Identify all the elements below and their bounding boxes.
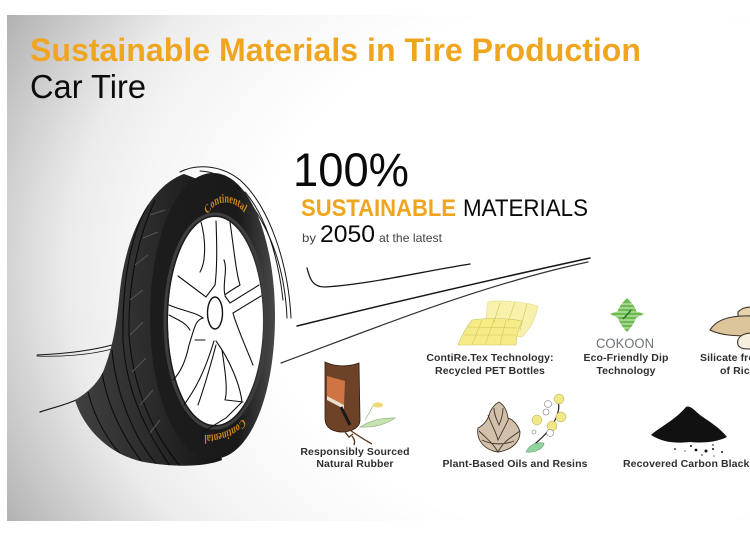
item: Plant-Based Oils and Resins	[442, 394, 588, 470]
title: Car Tire	[30, 68, 146, 105]
headline: 100% sustainable materials by 2050: 100%	[293, 143, 409, 196]
headline: 100% sustainable materials by 2050	[293, 143, 588, 248]
Cokoon wordmark: COKOON	[596, 336, 654, 351]
label: Recovered Carbon Black	[623, 458, 750, 470]
icon: textile	[458, 301, 538, 345]
icon: rubber tree trunk	[325, 362, 395, 445]
headline: 100% sustainable materials by 2050: at the latest	[379, 231, 443, 245]
item: Recovered Carbon Black	[623, 407, 750, 470]
icon: rapeseed flower	[526, 394, 566, 452]
label: Recycled PET Bottles	[435, 365, 545, 377]
speed lines and car outline	[37, 167, 590, 412]
headline: 100% sustainable materials by 2050: by	[302, 231, 316, 245]
item: Cokoon	[583, 298, 669, 377]
label: Natural Rubber	[316, 458, 394, 470]
icon: green diamond	[610, 298, 644, 332]
rim opening	[168, 217, 263, 425]
tread grooves	[88, 200, 180, 466]
label: Eco-Friendly Dip	[583, 352, 669, 364]
Continental logo bottom: Continental	[204, 420, 246, 444]
icon: pine cone	[478, 402, 520, 452]
headline: 100% sustainable materials by 2050: 2050	[320, 221, 375, 248]
tire sidewall	[150, 173, 275, 459]
rim edge highlight	[165, 214, 266, 428]
title	[30, 32, 641, 105]
item: Natural Rubber	[300, 362, 410, 470]
icon: rice husks	[710, 307, 750, 349]
headline: 100% sustainable materials by 2050: MATERIALS	[463, 195, 588, 222]
tire	[75, 173, 275, 466]
label: Responsibly Sourced	[300, 446, 410, 458]
item: ContiRe.Tex	[426, 301, 554, 377]
headline: 100% sustainable materials by 2050: SUSTAINABLE	[301, 195, 456, 222]
tire tread	[75, 174, 222, 466]
item: Silicate	[700, 307, 750, 377]
label: Plant-Based Oils and Resins	[442, 458, 588, 470]
wheel spokes	[169, 221, 261, 432]
Continental logo top: Continental	[204, 194, 248, 213]
label: ContiRe.Tex Technology:	[426, 352, 554, 364]
icon: carbon black pile	[651, 407, 727, 457]
title: Sustainable Materials in Tire Production	[30, 32, 641, 68]
label: Technology	[596, 365, 656, 377]
infographic canvas	[31, 38, 750, 467]
